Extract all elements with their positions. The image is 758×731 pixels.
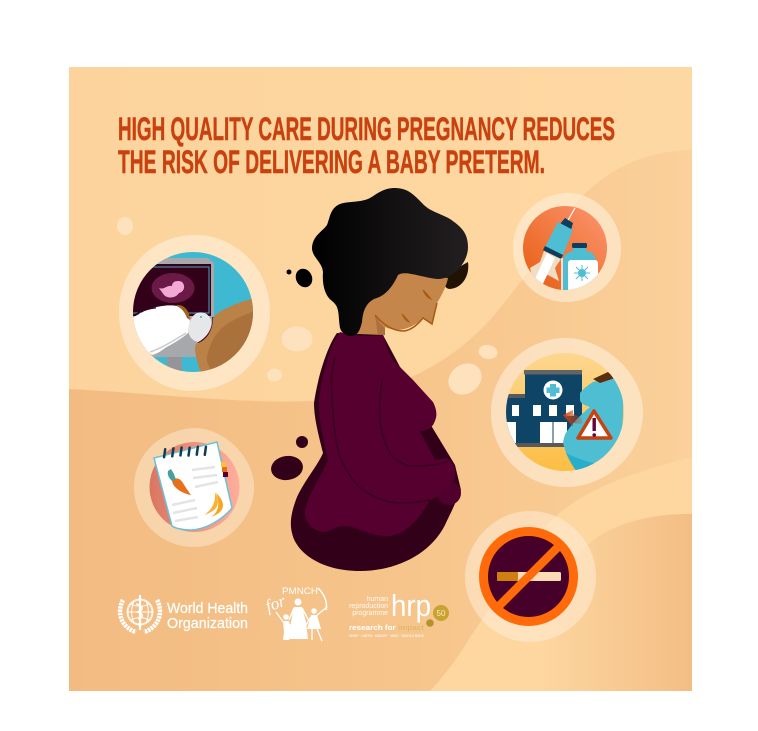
decorative bubbles [117,217,499,482]
logo: HRP research for impact: 50 [437,609,446,618]
logo: PMNCH: PMNCH [282,586,318,597]
body dark lower [291,333,461,571]
woman figure [291,188,468,571]
logo: HRP research for impact: hrp [391,588,431,623]
logo: HRP research for impact: human [367,596,388,603]
logo: PMNCH: for [263,591,288,616]
logo: HRP research for impact: UNDP · UNFPA · UNICEF · WHO · WORLD BANK [349,634,425,638]
logo: World Health Organization: World Health [167,600,248,617]
logo: World Health Organization: Organization [167,615,248,632]
logo: HRP research for impact [349,588,449,638]
logo: HRP research for impact: reproduction [349,603,388,610]
logo: World Health Organization [120,595,248,632]
WHO emblem [120,595,160,632]
title [118,111,615,180]
hair [312,188,468,336]
hand lobe [437,481,461,505]
icon: vaccine [513,193,621,302]
icon: hospital [491,338,643,487]
back hair [445,262,468,289]
logo: PMNCH [263,586,327,641]
icon: no smoking [465,511,596,642]
background panel [69,67,692,691]
icon: nutrition notepad [134,428,254,547]
logo: HRP research for impact: research for impact [349,623,425,632]
neck and face [355,272,448,335]
body dress [305,332,456,536]
logo: HRP research for impact: programme [352,610,388,617]
icon: ultrasound [119,235,270,391]
